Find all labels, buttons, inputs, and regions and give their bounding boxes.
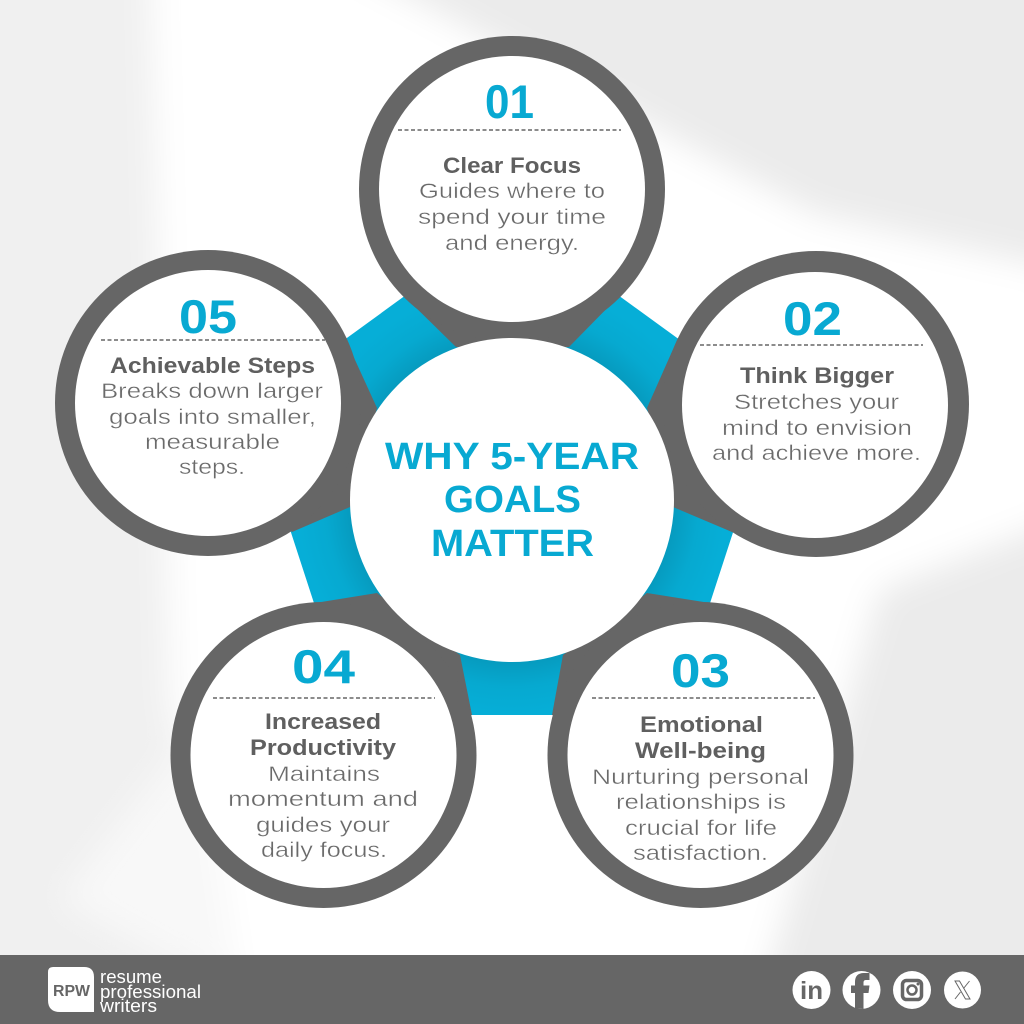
icon: facebook (842, 971, 880, 1009)
logo (48, 967, 201, 1016)
text 05: Achievable Steps (110, 353, 315, 378)
text 02: Stretches your (734, 390, 899, 414)
icon: linkedin (792, 971, 830, 1009)
text 03: crucial for life (625, 816, 777, 840)
text 01: Guides where to (419, 179, 605, 203)
circle 02: Think Bigger (647, 251, 969, 557)
text 04: Productivity (250, 735, 397, 760)
ring 02 (647, 251, 969, 557)
text 04: Maintains (268, 762, 380, 786)
circle 05: Achievable Steps (55, 250, 377, 556)
text 01: spend your time (418, 205, 606, 229)
center title: MATTER (431, 523, 594, 565)
circle 01: Clear Focus (359, 36, 665, 347)
text 01 (418, 153, 606, 255)
text 05: Breaks down larger (101, 379, 323, 403)
center title (385, 436, 639, 565)
ring 01 (359, 36, 665, 347)
footer bar (0, 955, 1024, 1024)
center title: WHY 5-YEAR (385, 436, 639, 478)
circle 03: Emotional Well-being (548, 593, 854, 908)
center title: GOALS (444, 479, 581, 521)
text 03: Well-being (635, 738, 766, 763)
text 04: momentum and (228, 787, 418, 811)
logo: writers (99, 996, 157, 1016)
logo: professional (100, 982, 201, 1002)
text 05: steps. (179, 455, 245, 479)
number 04: 04 (292, 640, 355, 693)
ring 05 (55, 250, 377, 556)
text 03: relationships is (616, 790, 786, 814)
text 04: guides your (256, 813, 390, 837)
text 02: mind to envision (722, 416, 912, 440)
icon: linkedin: in (800, 977, 823, 1005)
text 02: Think Bigger (740, 363, 894, 388)
text 04: daily focus. (261, 838, 387, 862)
circle 04: Increased Productivity (170, 593, 476, 908)
number 01: 01 (485, 75, 534, 128)
number 05: 05 (179, 290, 237, 343)
icon: X (944, 972, 981, 1008)
text 02: and achieve more. (712, 441, 921, 465)
text 04: Increased (265, 709, 381, 734)
text 03 (592, 712, 809, 865)
text 02 (712, 363, 921, 465)
text 05: measurable (145, 430, 280, 454)
icon: instagram (893, 971, 931, 1009)
text 03: Nurturing personal (592, 765, 809, 789)
logo: resume (100, 967, 162, 987)
number 02: 02 (783, 292, 842, 345)
text 01: Clear Focus (443, 153, 581, 178)
text 04 (228, 709, 418, 862)
number 03: 03 (671, 644, 730, 697)
text 01: and energy. (445, 231, 579, 255)
ring 03 (548, 593, 854, 908)
pentagon (250, 218, 774, 715)
center circle (350, 338, 674, 662)
text 03: Emotional (640, 712, 763, 737)
text 05: goals into smaller, (109, 405, 316, 429)
logo: RPW (53, 983, 90, 1000)
text 03: satisfaction. (633, 841, 768, 865)
text 05 (101, 353, 323, 479)
ring 04 (170, 593, 476, 908)
